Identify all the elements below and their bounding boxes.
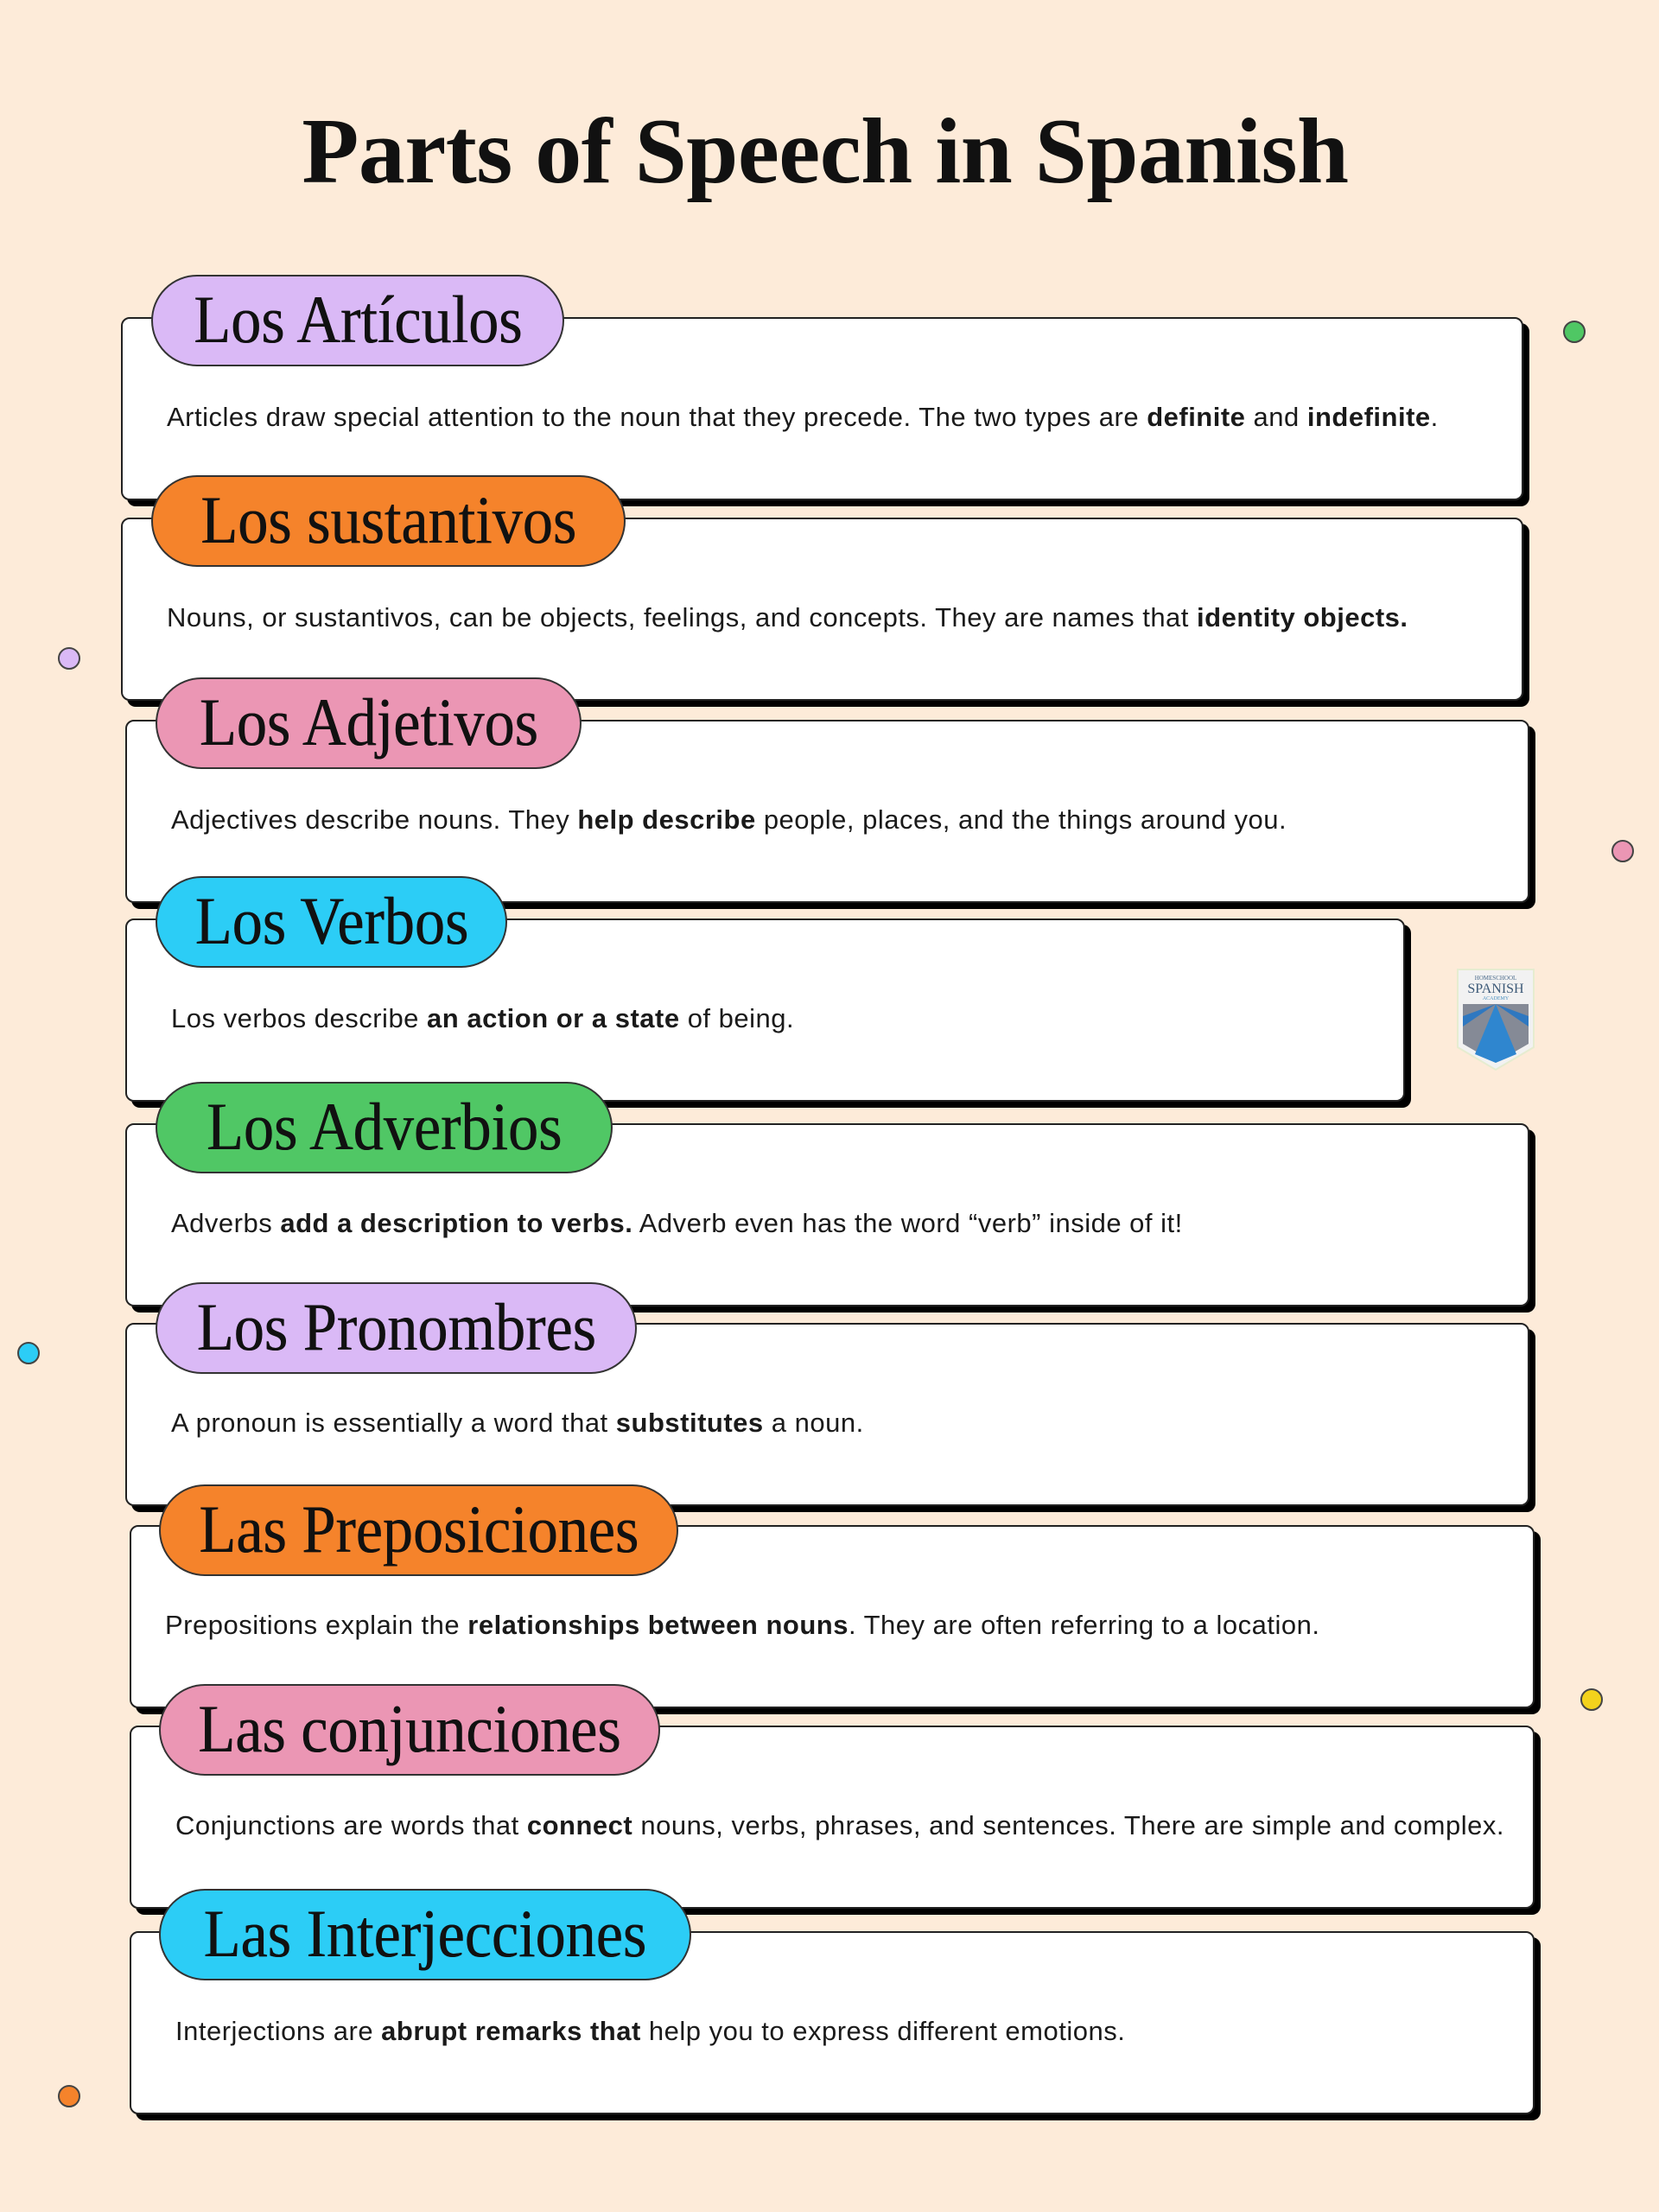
pill: Los Artículos: Los Artículos bbox=[194, 282, 522, 357]
dot: yellow bbox=[1580, 1688, 1603, 1711]
text: adverbios: Adverbs add a description to verbs. Adverb even has the word “verb” inside of it! bbox=[171, 1208, 1183, 1238]
pill: Las conjunciones: Las conjunciones bbox=[198, 1691, 621, 1766]
logo: Homeschool Spanish Academy: ACADEMY bbox=[1483, 996, 1510, 1001]
panel: adjetivos bbox=[125, 720, 1535, 909]
text: interjecciones: Interjections are abrupt remarks that help you to express different emotions. bbox=[175, 2016, 1125, 2046]
pill: Las Interjecciones bbox=[159, 1889, 691, 1980]
dot: purple bbox=[58, 647, 80, 670]
text: adjetivos: Adjectives describe nouns. They help describe people, places, and the things around you. bbox=[171, 804, 1287, 835]
panel: articulos bbox=[121, 317, 1529, 506]
panel: verbos bbox=[125, 918, 1411, 1108]
pill: Los Pronombres: Los Pronombres bbox=[196, 1289, 596, 1364]
pill: Las Preposiciones bbox=[159, 1484, 678, 1576]
panel: sustantivos bbox=[121, 518, 1529, 707]
panel: pronombres bbox=[125, 1323, 1535, 1512]
text: articulos: Articles draw special attention to the noun that they precede. The two types are definite and indefinite. bbox=[167, 402, 1439, 432]
pill: Los Adjetivos: Los Adjetivos bbox=[200, 684, 537, 760]
dot: orange bbox=[58, 2085, 80, 2107]
title: Parts of Speech in Spanish bbox=[302, 100, 1349, 203]
logo: Homeschool Spanish Academy: HOMESCHOOL bbox=[1475, 975, 1516, 982]
pill: Los Pronombres bbox=[156, 1282, 637, 1374]
panel: interjecciones bbox=[130, 1931, 1541, 2120]
text: verbos: Los verbos describe an action or a state of being. bbox=[171, 1003, 794, 1033]
pill: Las Interjecciones: Las Interjecciones bbox=[204, 1896, 646, 1971]
pill: Los Adjetivos bbox=[156, 677, 582, 769]
panel: conjunciones bbox=[130, 1726, 1541, 1915]
pill: Los Adverbios: Los Adverbios bbox=[207, 1089, 562, 1164]
logo: Homeschool Spanish Academy bbox=[1457, 969, 1535, 1071]
text: preposiciones: Prepositions explain the relationships between nouns. They are often referring to a location. bbox=[165, 1610, 1319, 1640]
text: conjunciones: Conjunctions are words that connect nouns, verbs, phrases, and sentences. There are simple and complex. bbox=[175, 1810, 1504, 1840]
dot: pink bbox=[1611, 840, 1634, 862]
pill: Los Verbos bbox=[156, 876, 507, 968]
dot: green bbox=[1563, 321, 1586, 343]
panel: preposiciones bbox=[130, 1525, 1541, 1714]
dot: blue bbox=[17, 1342, 40, 1364]
logo: Homeschool Spanish Academy: SPANISH bbox=[1467, 982, 1524, 996]
pill: Los sustantivos bbox=[151, 475, 626, 567]
pill: Los Artículos bbox=[151, 275, 564, 366]
panel: adverbios bbox=[125, 1123, 1535, 1313]
pill: Los Adverbios bbox=[156, 1082, 613, 1173]
pill: Las Preposiciones: Las Preposiciones bbox=[199, 1491, 639, 1567]
pill: Los Verbos: Los Verbos bbox=[194, 883, 468, 958]
pill: Los sustantivos: Los sustantivos bbox=[200, 482, 576, 557]
text: sustantivos: Nouns, or sustantivos, can be objects, feelings, and concepts. They are names that identity objects. bbox=[167, 602, 1408, 632]
pill: Las conjunciones bbox=[159, 1684, 660, 1776]
text: pronombres: A pronoun is essentially a word that substitutes a noun. bbox=[171, 1408, 864, 1438]
